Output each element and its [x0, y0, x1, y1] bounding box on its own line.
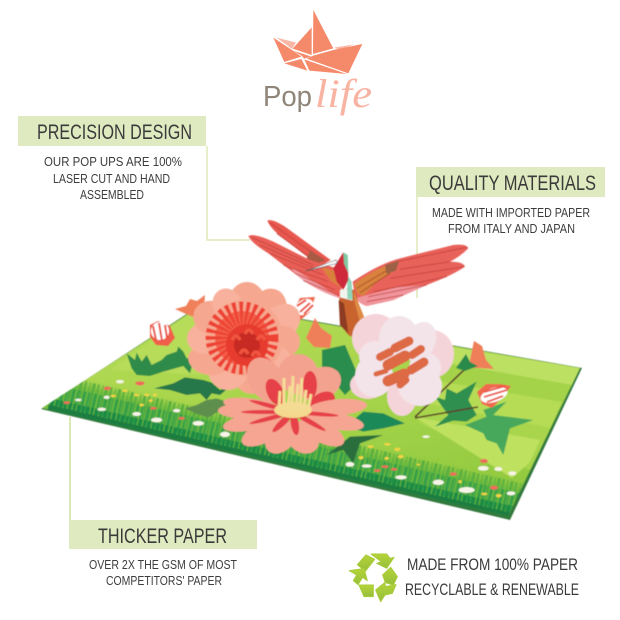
- orange flower right: [466, 341, 494, 369]
- logo: Poplife: life: [315, 71, 372, 116]
- back petals: [239, 351, 347, 409]
- heading band: [69, 520, 257, 549]
- capsule stamens: [376, 341, 424, 385]
- peony core: [226, 324, 268, 366]
- flower: red peony: [186, 282, 308, 397]
- foliage: stem lines: [415, 368, 478, 418]
- description: FROM ITALY AND JAPAN: [448, 221, 575, 236]
- description: COMPETITORS' PAPER: [106, 573, 222, 588]
- foliage: grey-green fern: [185, 398, 230, 417]
- connector: quality materials: [416, 197, 418, 298]
- back red petals: [262, 371, 339, 417]
- bud left: [150, 321, 175, 346]
- flower: pale pink blossom: [350, 314, 454, 416]
- description: ASSEMBLED: [80, 187, 144, 202]
- foliage: lower left leaves: [154, 377, 230, 400]
- description: OUR POP UPS ARE 100%: [44, 154, 182, 169]
- bud right: [477, 384, 511, 408]
- heading: THICKER PAPER: [98, 525, 227, 548]
- bird beak: [305, 260, 337, 271]
- heading: PRECISION DESIGN: [37, 121, 192, 144]
- card thickness edge: [41, 302, 582, 520]
- orange flower centre: [306, 318, 332, 348]
- peony petals: [186, 282, 308, 397]
- icon: origami boat: [273, 10, 362, 74]
- foliage: low dark fern: [327, 435, 383, 463]
- meadow grass band: [40, 390, 540, 518]
- logo: Poplife: [263, 10, 372, 116]
- description: LASER CUT AND HAND: [53, 171, 170, 186]
- heading band: [416, 167, 605, 197]
- foliage: right cluster light: [465, 402, 533, 455]
- hummingbird: [248, 220, 468, 338]
- right background stripes: [410, 345, 580, 470]
- pop-up card illustration: [40, 220, 582, 520]
- wing: front left: [248, 235, 344, 299]
- back petals: [350, 314, 454, 416]
- flower leaves right: [456, 354, 478, 371]
- stamens: [274, 376, 312, 418]
- icon: recycle arrows: [349, 554, 397, 602]
- foliage: fern right of flowers: [353, 412, 405, 432]
- heading band: [18, 116, 206, 146]
- callout: thicker paper: [69, 520, 257, 588]
- fold shading: [415, 417, 540, 478]
- recycling text: [405, 555, 579, 599]
- red rays: [241, 398, 339, 435]
- recycling text: MADE FROM 100% PAPER: [407, 555, 578, 574]
- recycling note: [349, 554, 579, 602]
- callout: precision design: [18, 116, 206, 202]
- connector: thicker paper: [69, 417, 71, 520]
- description: [432, 205, 590, 236]
- bird body: [333, 252, 368, 338]
- wing: back left: [267, 220, 331, 267]
- foliage: upper left leaves: [127, 347, 203, 376]
- foliage: right cluster dark: [435, 382, 477, 427]
- meadow flowers right: [346, 435, 516, 497]
- description: MADE WITH IMPORTED PAPER: [432, 205, 590, 220]
- callout: quality materials: [416, 167, 605, 236]
- description: [44, 154, 182, 202]
- orange flower left: [175, 295, 205, 318]
- description: [89, 557, 237, 588]
- front petals: [355, 316, 442, 406]
- connector: precision design: [207, 146, 250, 240]
- description: OVER 2X THE GSM OF MOST: [89, 557, 237, 572]
- bud back: [292, 296, 316, 322]
- meadow flowers left: [63, 380, 230, 437]
- green foliage: [127, 341, 533, 463]
- foliage: centre dark: [322, 345, 360, 395]
- flower: coral daisy: [218, 351, 369, 456]
- front petals: [218, 394, 369, 456]
- peony red rays: [215, 311, 269, 365]
- back orange flower and buds: [150, 295, 332, 348]
- wing: right: [353, 245, 468, 306]
- logo wordmark: Pop: [263, 81, 312, 113]
- card surface: [40, 303, 580, 518]
